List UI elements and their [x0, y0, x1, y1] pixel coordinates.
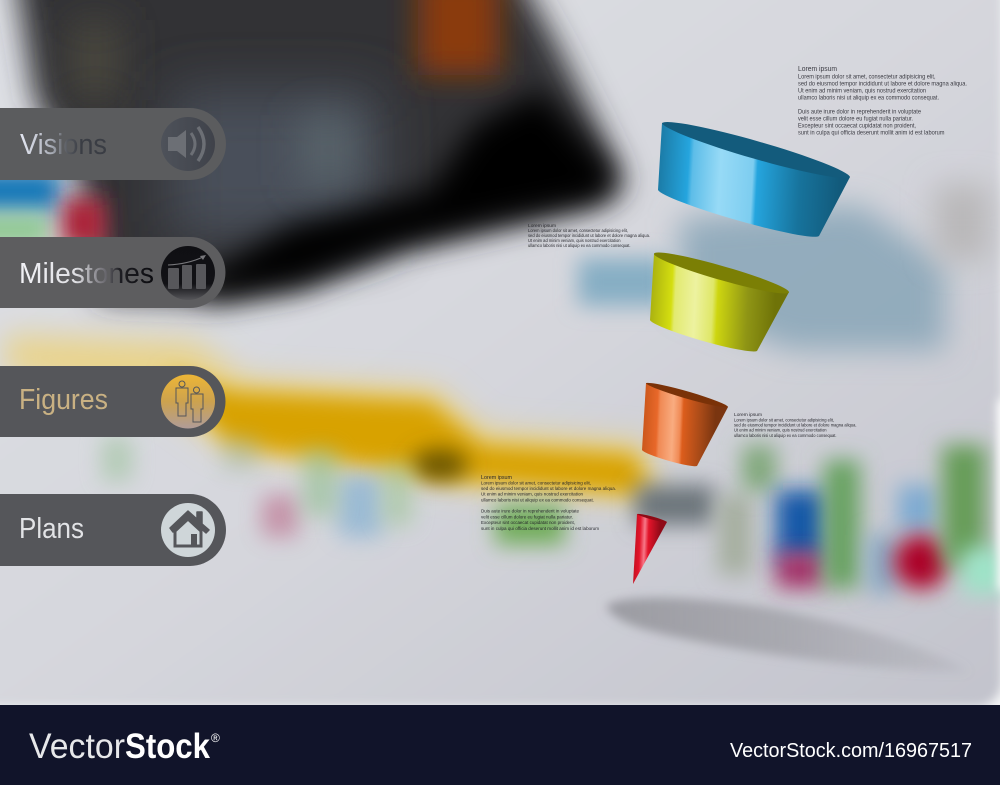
- label: Visions: Visions: [20, 129, 107, 161]
- text block: top right: sed do eiusmod tempor incididunt ut labore et dolore magna aliqua.: [798, 82, 967, 88]
- footer bar: [0, 705, 1000, 785]
- text block: top right: velit esse cillum dolore eu fugiat nulla pariatur.: [798, 116, 913, 122]
- text block: middle left of yellow: Lorem ipsum dolor sit amet, consectetur adipisicing elit,: [528, 228, 628, 233]
- text block: middle left of yellow: Ut enim ad minim veniam, quis nostrud exercitation: [528, 238, 621, 243]
- text block: right of orange: Ut enim ad minim veniam, quis nostrud exercitation: [734, 428, 827, 433]
- text block: middle left of yellow: [528, 223, 650, 248]
- label: Milestones: Milestones: [19, 258, 154, 290]
- pill: Visions: [0, 108, 226, 180]
- text block: left of red tip: Lorem ipsum dolor sit amet, consectetur adipisicing elit,: [481, 480, 591, 486]
- funnel segment: yellow: [650, 253, 789, 351]
- funnel segment: blue: [658, 122, 850, 237]
- text block: left of red tip: sed do eiusmod tempor incididunt ut labore et dolore magna aliqua.: [481, 486, 616, 491]
- text block: right of orange: sed do eiusmod tempor incididunt ut labore et dolore magna aliqua.: [734, 422, 856, 428]
- text block: left of red tip: sunt in culpa qui officia deserunt mollit anim id est laborum: [481, 526, 599, 531]
- ground shadow: [606, 598, 970, 672]
- footer url: VectorStock.com/16967517: [730, 740, 972, 762]
- text block: top right: [798, 66, 967, 136]
- text block: top right: Lorem ipsum: [798, 66, 837, 73]
- funnel segment: red tip: [633, 514, 667, 584]
- text block: top right: Lorem ipsum dolor sit amet, consectetur adipisicing elit,: [798, 74, 936, 80]
- text block: right of orange: Lorem ipsum dolor sit amet, consectetur adipisicing elit,: [734, 418, 834, 422]
- icon: two people: [161, 374, 215, 428]
- icon: speaker: [161, 117, 215, 171]
- text block: top right: Duis aute irure dolor in reprehenderit in voluptate: [798, 110, 922, 116]
- icon: house: [161, 503, 215, 557]
- funnel segment: orange: [642, 383, 728, 466]
- pill: Figures: [0, 366, 226, 437]
- text block: left of red tip: Duis aute irure dolor in reprehenderit in voluptate: [481, 509, 579, 514]
- text block: left of red tip: Excepteur sint occaecat cupidatat non proident,: [481, 520, 575, 525]
- text block: top right: Excepteur sint occaecat cupidatat non proident,: [798, 124, 916, 130]
- logo: VectorStock: ®: [211, 731, 220, 745]
- text block: top right: Ut enim ad minim veniam, quis nostrud exercitation: [798, 88, 926, 94]
- text block: left of red tip: [481, 475, 616, 531]
- text block: left of red tip: Lorem ipsum: [481, 475, 512, 481]
- orange opening: [646, 383, 728, 407]
- text block: right of orange: ullamco laboris nisi ut aliquip ex ea commodo consequat.: [734, 433, 836, 438]
- icon: bar chart: [161, 246, 215, 300]
- text block: left of red tip: Ut enim ad minim veniam, quis nostrud exercitation: [481, 492, 583, 497]
- text block: right of orange: Lorem ipsum: [734, 412, 762, 417]
- text block: left of red tip: ullamco laboris nisi ut aliquip ex ea commodo consequat.: [481, 498, 594, 502]
- text block: right of orange: [734, 412, 856, 438]
- pill: Plans: [0, 494, 226, 566]
- pill: Milestones: [0, 237, 225, 308]
- label: Figures: Figures: [19, 384, 108, 416]
- text block: middle left of yellow: sed do eiusmod tempor incididunt ut labore et dolore magna aliqua.: [528, 233, 650, 238]
- logo: VectorStock: Vector: [29, 727, 125, 766]
- right edge glow: [998, 400, 1000, 590]
- text block: middle left of yellow: ullamco laboris nisi ut aliquip ex ea commodo consequat.: [528, 243, 630, 248]
- logo: VectorStock: [29, 727, 220, 766]
- logo: VectorStock: Stock: [125, 727, 210, 766]
- yellow opening: [654, 253, 789, 293]
- label: Plans: Plans: [19, 513, 84, 545]
- text block: left of red tip: velit esse cillum dolore eu fugiat nulla pariatur.: [481, 514, 573, 519]
- blue opening: [662, 122, 850, 178]
- text block: top right: sunt in culpa qui officia deserunt mollit anim id est laborum: [798, 130, 944, 136]
- text block: middle left of yellow: Lorem ipsum: [528, 223, 556, 228]
- text block: top right: ullamco laboris nisi ut aliquip ex ea commodo consequat.: [798, 96, 939, 102]
- red opening: [637, 514, 667, 522]
